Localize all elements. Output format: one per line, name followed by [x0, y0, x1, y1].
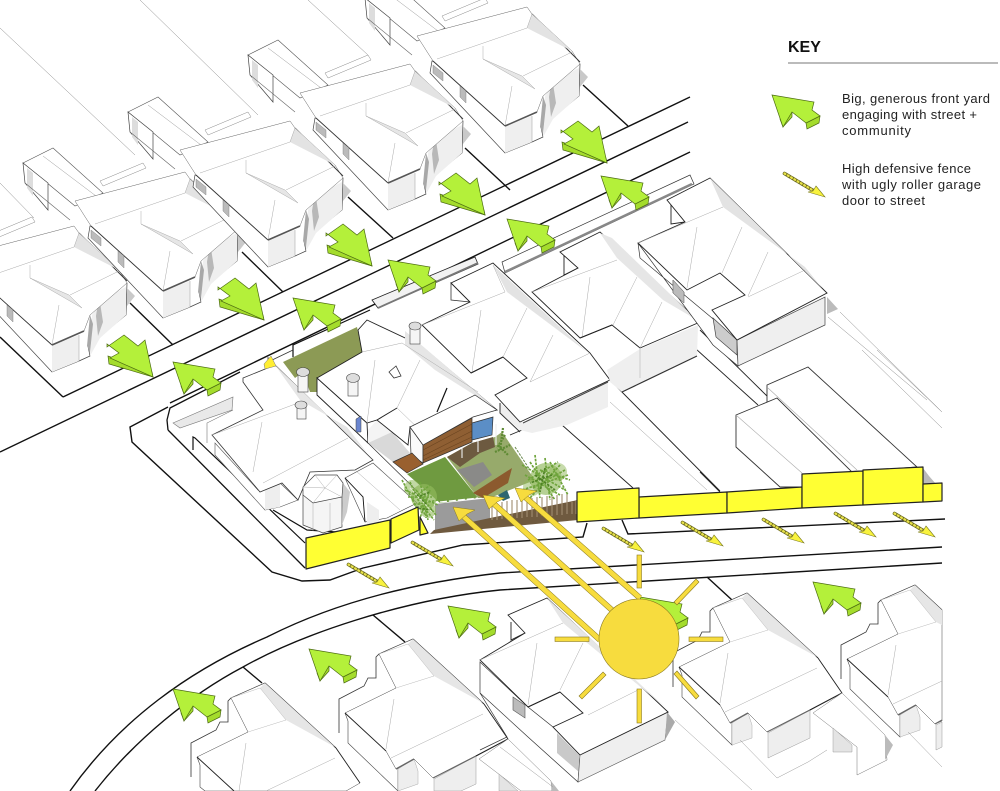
key heading: KEY [788, 39, 821, 56]
timber-clad front volume [393, 395, 497, 473]
sun light arrows into front yard [453, 488, 640, 640]
key text: fence: door to street [842, 193, 925, 208]
upper row of houses [0, 0, 588, 372]
corner kerb and lower footpath [130, 407, 945, 581]
climber by wall [495, 428, 510, 455]
sun [555, 555, 723, 723]
key icon: dotted arrow [784, 174, 825, 197]
neighbour house B [532, 232, 700, 392]
key text: fence: High defensive fence [842, 161, 971, 176]
green arrows lower street [173, 582, 861, 723]
key text: front yard: engaging with street + [842, 107, 977, 122]
house behind the sun [480, 598, 752, 790]
green arrows upper street [107, 121, 649, 396]
lower house, left [339, 639, 559, 791]
rear property lines [0, 0, 942, 428]
green arrow behind the sun [640, 597, 688, 631]
corner house [167, 365, 417, 568]
site backyard lawn [283, 327, 362, 392]
outbuildings right of the site [736, 367, 936, 487]
key text: front yard: Big, generous front yard [842, 91, 990, 106]
lower house, far right [841, 585, 942, 767]
key text: front yard: community [842, 123, 912, 138]
tree left [402, 480, 438, 520]
neighbour house C [638, 178, 838, 366]
lot lines right of the site [510, 330, 767, 492]
neighbour house A [422, 263, 610, 433]
key icon: green arrow [772, 95, 820, 129]
key text: fence: with ugly roller garage [841, 177, 981, 192]
tree right [515, 447, 570, 500]
rainwater tank [303, 475, 350, 533]
key [772, 39, 998, 208]
front yard landscape [407, 432, 578, 534]
chimneys [295, 322, 421, 419]
house right of the sun [673, 593, 893, 778]
small yellow gate [264, 356, 276, 369]
dotted fence arrows [348, 514, 935, 588]
lower street curves [70, 547, 942, 791]
upper street lines and lot boundaries [0, 85, 690, 452]
lower house, far left [191, 683, 360, 791]
yellow fence panels [306, 467, 942, 569]
roadside fence strips [268, 175, 694, 362]
central house [317, 320, 497, 492]
